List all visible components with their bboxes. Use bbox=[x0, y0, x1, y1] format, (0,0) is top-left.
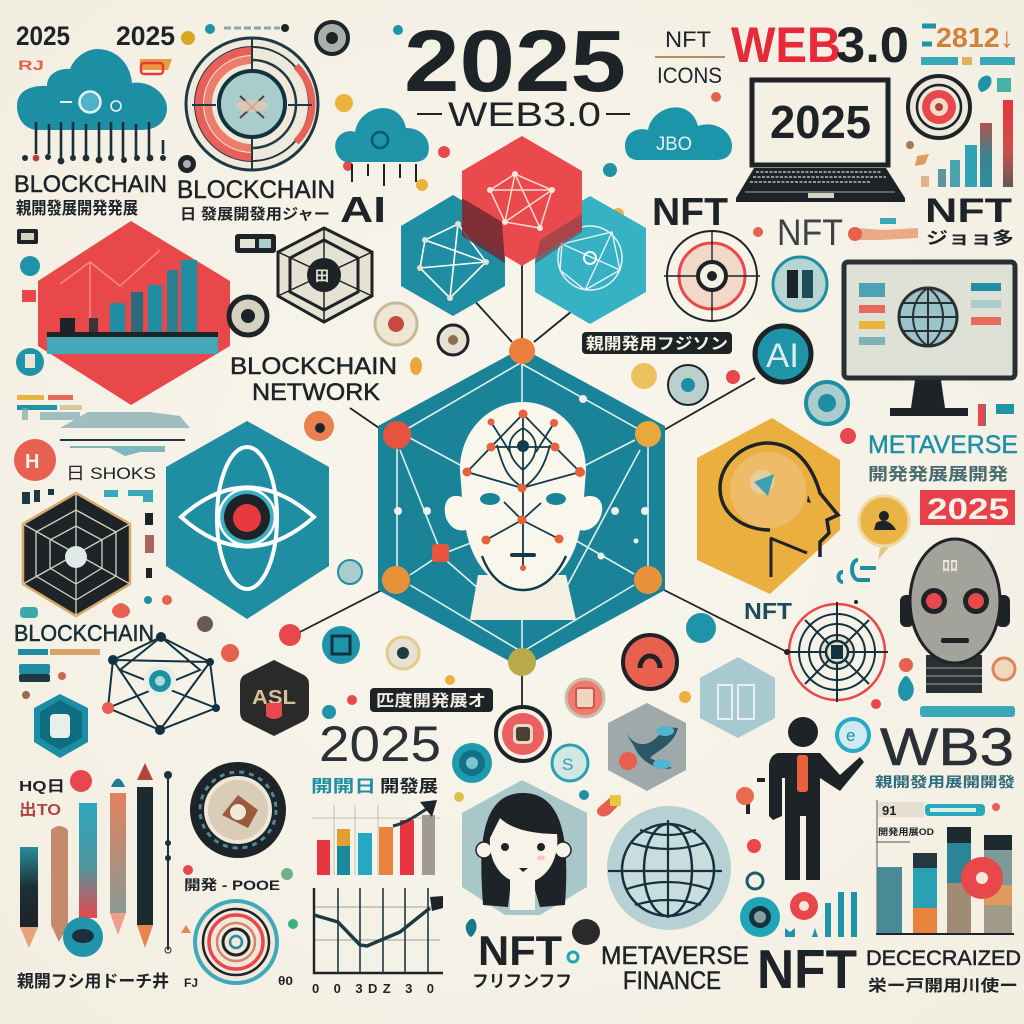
network nodes on hexagon bbox=[382, 338, 662, 676]
label: nft icons: NFT bbox=[665, 27, 711, 52]
hexagon: pale blue with book bbox=[700, 657, 775, 738]
label: blockchain top left: 親開發展開発発展 bbox=[16, 199, 138, 218]
label: decentralized bbox=[866, 947, 1021, 995]
label: metaverse and 2025 red tag: METAVERSE bbox=[868, 431, 1018, 459]
text scribbles mid bottom left: 開発 - POOE bbox=[184, 877, 280, 893]
hexagon: yellow head bbox=[697, 418, 840, 594]
icon: robot head: ﾛﾛ bbox=[942, 558, 958, 575]
label: scribbles lower left: 出TO bbox=[19, 801, 61, 819]
icon: robot head bbox=[871, 539, 1015, 717]
label: black tag 2 bbox=[370, 688, 493, 712]
text scribbles mid bottom left: FJ bbox=[184, 976, 198, 990]
hexagon: teal left cluster bbox=[401, 195, 505, 316]
text scribbles mid bottom left bbox=[181, 865, 298, 990]
hexagon: grey with abstract bbox=[608, 703, 686, 791]
icon: dark hexagon AI bbox=[240, 660, 309, 736]
icon: web hexagon: 田 bbox=[315, 268, 329, 284]
label: metaverse and 2025 red tag: 開発発展展開発 bbox=[868, 465, 1008, 484]
label: blockchain top left bbox=[14, 171, 167, 218]
central hexagon with face bbox=[378, 338, 665, 676]
decorative bars lower left bbox=[18, 649, 100, 699]
bar chart lower right bbox=[876, 800, 1014, 934]
icon: concentric target bbox=[178, 38, 318, 173]
bar chart with arrow bbox=[311, 777, 440, 875]
icon: left column labels and red circle bbox=[14, 408, 334, 483]
label: blockchain second: BLOCKCHAIN bbox=[177, 176, 335, 204]
label: metaverse and 2025 red tag: 2025 bbox=[927, 493, 1009, 526]
line chart: 0 0 3DZ 3 0 bbox=[312, 981, 434, 996]
icon: left column labels and red circle: H bbox=[25, 451, 39, 473]
left edge small icons bbox=[16, 256, 82, 410]
hexagon: girl portrait bbox=[462, 780, 587, 915]
icon: business person bbox=[736, 717, 869, 889]
icon: small teal glyphs right bbox=[838, 560, 876, 604]
label: NFT under yellow hexagon: NFT bbox=[744, 598, 792, 624]
icon: dark hexagon AI: ASL bbox=[252, 687, 296, 709]
bar chart with arrow: 開發展 bbox=[380, 777, 438, 796]
decorative dots cluster top centre bbox=[335, 25, 624, 220]
label: blockchain top left: BLOCKCHAIN bbox=[14, 171, 167, 198]
bar chart lower right: 開発用展OD bbox=[878, 826, 935, 837]
icon: globe bbox=[607, 806, 731, 930]
hexagon: light teal right cluster bbox=[535, 196, 646, 324]
icon: laptop 2025: 2025 bbox=[770, 96, 871, 148]
label: nft icons: ICONS bbox=[657, 63, 722, 88]
icon: spiral target bbox=[195, 901, 277, 983]
label: 2025 bottom centre: 2025 bbox=[319, 716, 441, 772]
icon: small cloud right bbox=[625, 92, 732, 160]
label: WB3 bbox=[875, 718, 1015, 790]
label: nft bottom: NFT bbox=[478, 927, 562, 974]
icon: web hexagon bbox=[278, 228, 372, 322]
label: nft bottom: フリフンフフ bbox=[472, 972, 572, 991]
icon: left column labels and red circle: 日 SHOKS bbox=[66, 464, 156, 483]
icon: teal disc bbox=[773, 257, 827, 311]
label: metaverse finance bbox=[601, 942, 749, 995]
label: web3.0 red: 3.0 bbox=[836, 17, 909, 73]
label: 2024 scribble: 2812↓ bbox=[936, 22, 1014, 53]
top left 2025 labels: 2025 bbox=[16, 21, 70, 51]
icon: small ring top bbox=[316, 22, 348, 54]
label: decentralized: 栄ー戸開用川使ー bbox=[868, 977, 1018, 995]
label: web3.0 red bbox=[731, 17, 909, 73]
top left 2025 labels bbox=[16, 21, 289, 74]
label: nft large bottom: NFT bbox=[757, 938, 857, 1000]
label: scribble tag left bbox=[17, 229, 38, 244]
label: japanese tag centre: 親開発用フジソン bbox=[586, 335, 728, 353]
labels: nft right row: NFT bbox=[925, 192, 1012, 230]
icon: business person: e bbox=[846, 726, 855, 745]
labels: nft right row bbox=[652, 191, 1014, 253]
label: blockchain second: 日 發展開發用ジャー bbox=[180, 206, 330, 223]
icon: dark ring with photo bbox=[190, 762, 286, 858]
label: metaverse finance: FINANCE bbox=[623, 967, 721, 995]
label: blockchain lower left: BLOCKCHAIN bbox=[14, 620, 154, 646]
label: scribbles lower left bbox=[17, 770, 169, 991]
icon: red ring with bars bbox=[906, 76, 1013, 187]
icons: row of discs near centre bottom bbox=[279, 624, 455, 719]
title bbox=[404, 13, 630, 134]
icon: dark web hexagon bbox=[23, 493, 130, 616]
label: AI: AI bbox=[340, 189, 386, 230]
icon: spider web target bbox=[784, 602, 888, 702]
label: scribbles lower left: HQ日 bbox=[19, 778, 65, 795]
labels: nft right row: NFT bbox=[777, 212, 843, 253]
label: japanese tag centre bbox=[582, 332, 732, 354]
icon: small blue cloud centre bbox=[335, 108, 429, 186]
label: metaverse and 2025 red tag bbox=[868, 431, 1018, 526]
top left 2025 labels: 2025 bbox=[116, 21, 175, 51]
title: 2025 bbox=[404, 13, 626, 110]
hexagon: red top bbox=[462, 136, 582, 266]
label: WB3: WB3 bbox=[880, 718, 1014, 777]
icon: AI circle: AI bbox=[766, 337, 799, 375]
hexagon: red chart left bbox=[38, 221, 230, 405]
icons: lower right discs and bars bbox=[740, 892, 857, 937]
icon: red bullet ring bbox=[496, 707, 550, 761]
label: scribbles lower left: 親開フシ用ドーチ井 bbox=[17, 972, 169, 991]
top left 2025 labels: RJ bbox=[18, 57, 44, 73]
text scribbles mid bottom left: θ0 bbox=[278, 974, 293, 988]
icon: laptop 2025 bbox=[736, 80, 905, 202]
label: 2024 scribble bbox=[921, 22, 1015, 65]
label: blockchain second bbox=[177, 176, 335, 223]
label: web3.0 red: WEB bbox=[731, 17, 841, 73]
label: WB3: 親開發用展開開發 bbox=[875, 774, 1015, 790]
icon: tag panel and dots bbox=[229, 234, 468, 355]
icon dots mid right bbox=[631, 363, 1014, 444]
icon: desktop monitor globe bbox=[844, 262, 1015, 416]
bar chart lower right: 91 bbox=[882, 803, 896, 818]
label: decentralized: DECECRAIZED bbox=[866, 947, 1021, 970]
icons: lower right discs: S bbox=[562, 755, 573, 774]
bar chart with arrow: 開開日 bbox=[311, 777, 376, 796]
icon: network polygon bbox=[102, 632, 239, 735]
label: black tag 2: 匹度開発展オ bbox=[376, 691, 486, 710]
icon: vertical small glyphs bbox=[20, 489, 362, 632]
hexagon connectors bbox=[296, 258, 787, 708]
icon: pencil bars bbox=[20, 763, 172, 957]
label: blockchain network: BLOCKCHAIN bbox=[230, 353, 397, 380]
hexagon: teal eye atom bbox=[166, 421, 329, 619]
label: blockchain network: NETWORK bbox=[252, 379, 380, 406]
title: WEB3.0 bbox=[448, 96, 601, 134]
icon: AI circle bbox=[755, 326, 811, 382]
label: blockchain network bbox=[230, 353, 422, 406]
line chart bbox=[312, 888, 443, 996]
icon: small cloud right: JBO bbox=[656, 134, 692, 155]
icon: speech bubble yellow bbox=[859, 496, 909, 560]
label: metaverse finance: METAVERSE bbox=[601, 942, 749, 970]
labels: nft right row: ジョョ多 bbox=[926, 228, 1014, 248]
icon: target concentric top right bbox=[664, 230, 760, 322]
icon: teal hexagon shield bbox=[34, 694, 88, 758]
label: nft icons bbox=[655, 27, 725, 88]
icons: lower right discs bbox=[452, 613, 716, 816]
face bbox=[445, 402, 602, 620]
label: nft bottom bbox=[466, 919, 600, 991]
labels: nft right row: NFT bbox=[652, 191, 728, 234]
icon: blockchain cloud with hanging nodes bbox=[17, 49, 167, 164]
